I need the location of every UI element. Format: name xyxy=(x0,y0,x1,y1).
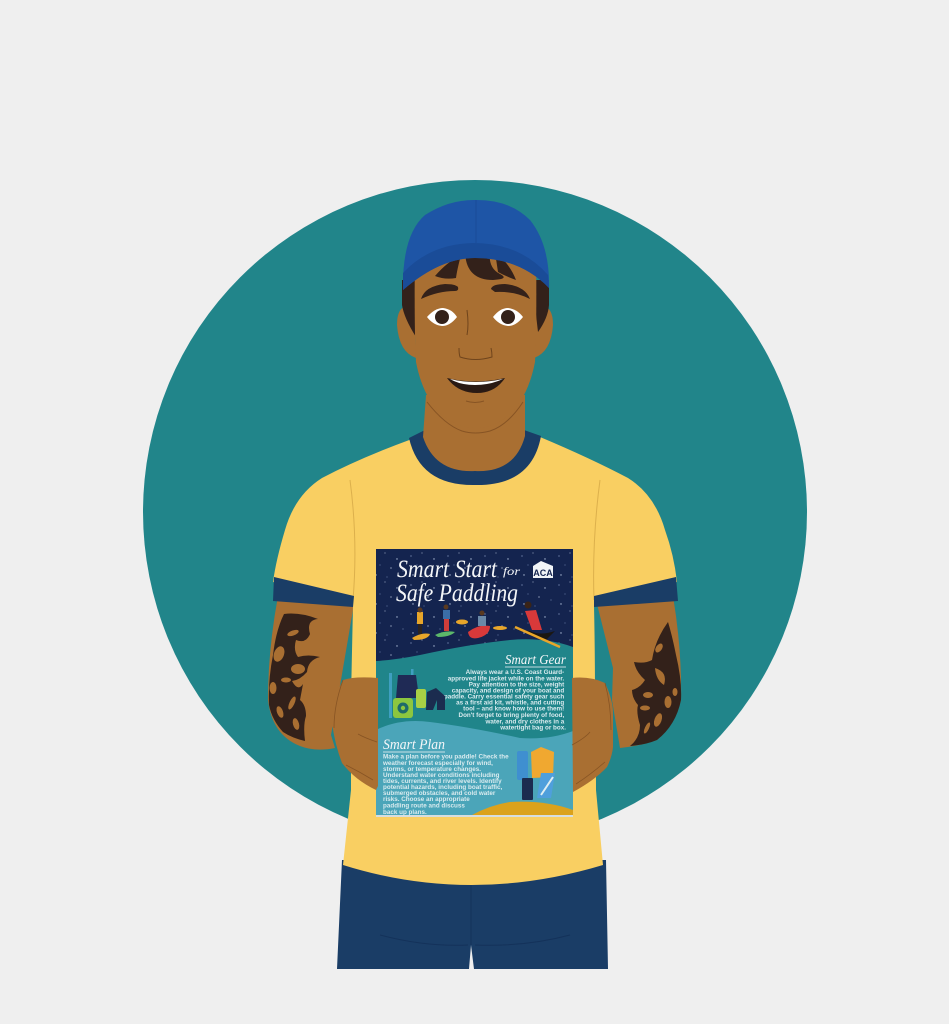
poster title: Safe Paddling xyxy=(396,580,518,607)
poster xyxy=(376,549,573,817)
text: smart gear: watertight bag or box. xyxy=(499,724,566,732)
left arm xyxy=(268,596,354,750)
text: smart plan: potential hazards, including boat traffic, xyxy=(383,784,503,791)
text: smart gear: approved life jacket while on the water. xyxy=(448,676,564,682)
heading: smart plan: Smart Plan xyxy=(383,737,445,753)
text: smart plan: Make a plan before you paddle! Check the xyxy=(383,754,509,760)
hair: sides xyxy=(402,280,549,337)
heading: smart gear: Smart Gear xyxy=(505,653,566,668)
text: smart plan: risks. Choose an appropriate xyxy=(383,796,470,803)
shirt xyxy=(273,437,678,885)
mouth xyxy=(447,378,505,393)
poster title: for xyxy=(503,564,520,578)
ACA logo xyxy=(533,561,553,578)
text: smart gear: Pay attention to the size, weight xyxy=(469,682,565,688)
tattoo: right arm xyxy=(630,622,681,746)
sleeve trim: right xyxy=(594,577,678,607)
tattoo: left arm xyxy=(269,614,320,741)
text: smart plan: Understand water conditions including xyxy=(383,772,500,779)
poster night sky xyxy=(376,549,573,661)
text: smart plan: storms, or temperature changes. xyxy=(383,766,481,773)
left hand xyxy=(332,677,378,790)
paddlers xyxy=(412,602,560,647)
text: smart gear: as a first aid kit, whistle, and cutting xyxy=(456,700,564,706)
ears xyxy=(397,306,553,358)
text: smart gear: Don't forget to bring plenty of food, xyxy=(459,712,564,719)
face xyxy=(415,240,536,428)
sleeve trim: left xyxy=(273,577,354,607)
text: smart gear: water, and dry clothes in a xyxy=(484,718,565,726)
neck and collar xyxy=(409,395,541,485)
text: smart plan: paddling route and discuss xyxy=(383,802,465,810)
text: smart plan: submerged obstacles, and cold water xyxy=(383,790,496,797)
text: smart gear: capacity, and design of your boat and xyxy=(452,688,564,694)
text: smart plan: weather forecast especially for wind, xyxy=(382,760,493,767)
poster title: Smart Start xyxy=(397,556,498,583)
pants xyxy=(337,860,608,969)
plan illustration xyxy=(517,747,555,800)
gold hill xyxy=(470,802,573,816)
nose xyxy=(459,310,492,360)
right arm xyxy=(597,596,681,748)
text: smart plan: tides, currents, and river levels. Identify xyxy=(383,778,502,785)
text: smart plan: back up plans. xyxy=(383,809,427,816)
eyebrows xyxy=(421,284,458,299)
text: smart gear: paddle. Carry essential safety gear such xyxy=(444,694,564,700)
light blue wave xyxy=(376,721,573,817)
cap xyxy=(403,200,549,290)
right hand xyxy=(572,678,613,792)
poster title xyxy=(396,556,520,607)
gear illustration xyxy=(389,669,445,718)
head xyxy=(397,200,553,433)
teal circle backdrop xyxy=(143,180,807,844)
ACA logo: ACA xyxy=(533,568,553,578)
eyes xyxy=(427,308,457,326)
teal wave xyxy=(376,639,573,738)
text: smart gear: tool – and know how to use them! xyxy=(463,706,564,712)
text: smart gear: Always wear a U.S. Coast Guard- xyxy=(466,669,564,676)
hair: fringe xyxy=(435,252,516,280)
